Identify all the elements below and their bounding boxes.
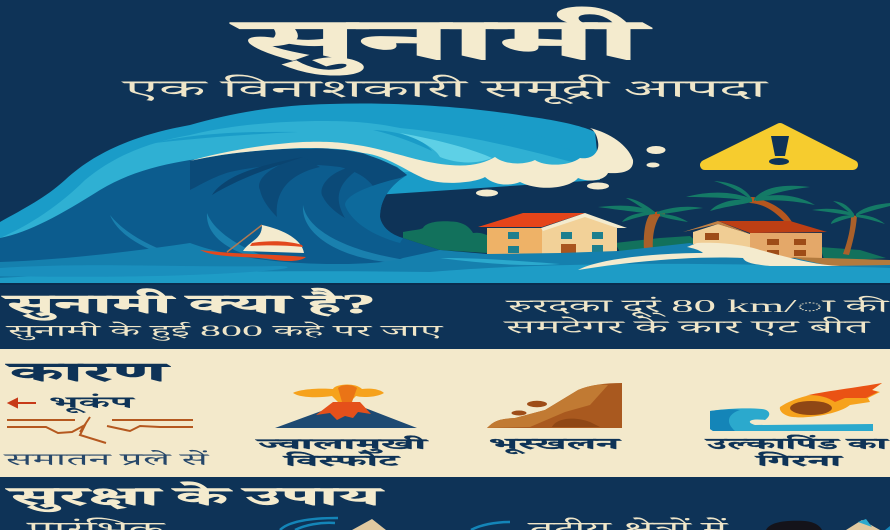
icon: sailboat [200,225,306,261]
house: red roof [478,213,627,255]
illustration: tsunami wave [0,104,666,283]
title: सुनामी [229,7,651,75]
label: volcanic eruption: ज्वालामुखी [255,435,429,454]
subtitle: एक विनाशकारी समूद्री आपदा [121,74,771,104]
palm tree 3 [812,201,890,255]
wave foam lip [190,128,633,188]
heading: safety measures: सुरक्षा के उपाय [5,481,387,512]
icon: signal arcs and tower [280,518,386,530]
icon: person and house [766,519,890,530]
icon: arcs near coast [471,522,510,530]
icon: landslide [487,383,622,428]
text: earthquake caption: समातन प्रले सें [3,449,210,469]
panel: what is a tsunami [0,285,890,349]
icon: warning triangle [705,128,853,165]
icon: volcano [275,384,417,428]
shore and flood foam [578,243,890,270]
text: tsunami left caption: सुनामी के हुई 800 कहे पर जाए [4,321,446,341]
label: falling meteorite line 2: गिरना [754,452,845,470]
bushes and island foliage [403,221,886,262]
house: brown roof [683,221,827,258]
icon: meteorite [710,383,882,431]
sea band bottom edge [0,283,890,285]
heading: causes: कारण [5,357,171,387]
label: earthquake [9,393,138,414]
spray droplets [476,146,666,196]
panel: causes [0,349,890,477]
icon: fault line crack [7,417,193,443]
label: earthquake: भूकंप [49,393,138,414]
label: falling meteorite: उल्कापिंड का [705,434,890,453]
sea [0,243,890,283]
label: volcanic eruption line 2: विस्फोट [282,452,401,470]
text: speed caption: रुरदका दूर्ं 80 km/ा की [505,295,890,317]
palm tree 2 [686,181,815,222]
text: sea caption: समटेगर के कार एट बीत [502,317,872,337]
palm tree 1 [598,198,703,250]
label: landslide: भूस्खलन [489,436,622,454]
heading: what is a tsunami: सुनामी क्या है? [1,288,376,322]
